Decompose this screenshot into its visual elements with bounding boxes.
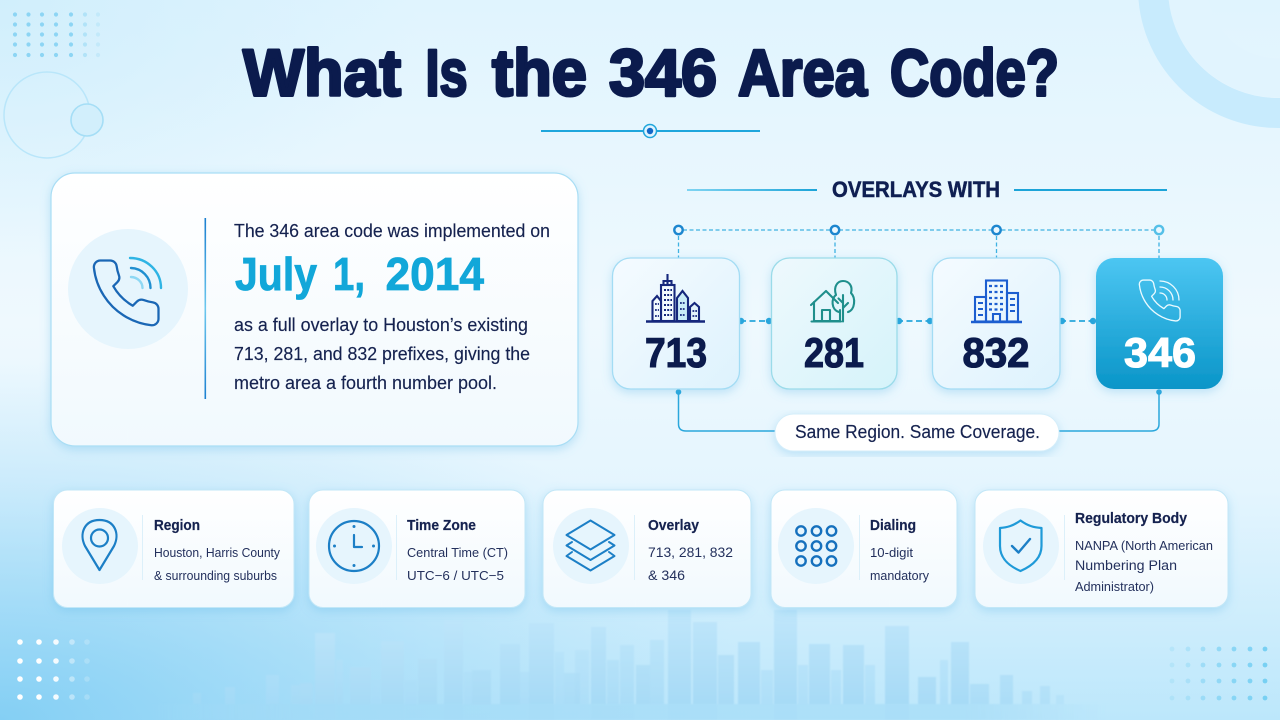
icon: downtown skyline [646, 274, 705, 322]
panel: overlay [543, 490, 751, 608]
panel: implementation date [51, 173, 578, 446]
text: date: July [235, 248, 317, 300]
panel: region: Houston, Harris County [154, 545, 280, 560]
card: 832: 832 [962, 329, 1030, 376]
title: Area [738, 36, 868, 110]
icon: phone with signal waves [68, 229, 188, 349]
panel: dialing [771, 490, 957, 608]
panel: regulatory body: Numbering Plan [1075, 558, 1177, 573]
card: 346 [1096, 258, 1223, 389]
panel: regulatory body: NANPA (North American [1075, 538, 1213, 553]
panel: time zone: Central Time (CT) [407, 545, 508, 560]
icon: shield with check [983, 508, 1059, 584]
text: date: 2014 [386, 248, 484, 300]
card: 832 [932, 258, 1060, 389]
panel: time zone: UTC−6 / UTC−5 [407, 568, 504, 583]
panel: dialing: 10-digit [870, 545, 913, 560]
text: description: as a full overlay to Houston’s existing [234, 315, 528, 335]
panel: dialing: Dialing [870, 518, 916, 534]
icon: house and tree [811, 281, 854, 322]
panel: regulatory body [975, 490, 1228, 608]
city skyline [150, 610, 1110, 720]
title: 346 [609, 36, 717, 110]
panel: overlay: & 346 [648, 567, 685, 583]
panel: dialing: mandatory [870, 568, 929, 583]
card: 346: 346 [1124, 329, 1196, 376]
dot grid bottom right [1170, 647, 1267, 700]
panel: region: Region [154, 518, 200, 534]
decorative circles top left [4, 72, 103, 158]
title: the [492, 36, 587, 110]
card: 713: 713 [645, 329, 707, 376]
panel: regulatory body: Regulatory Body [1075, 511, 1187, 527]
icon: clock [316, 508, 392, 584]
panel: region [54, 490, 294, 608]
connector network [674, 226, 1163, 431]
dot grid top left [13, 12, 100, 57]
text: intro line: The 346 area code was implemented on [234, 221, 550, 241]
text: description: 713, 281, and 832 prefixes, giving the [234, 344, 530, 364]
text: description [234, 315, 530, 393]
card: 713 [612, 258, 740, 389]
title: Is [426, 36, 468, 110]
icon: office buildings [971, 280, 1022, 322]
panel: region: & surrounding suburbs [154, 568, 277, 583]
title: Code? [890, 36, 1059, 110]
title: What [243, 36, 401, 110]
icon: white phone [1139, 280, 1180, 321]
callout: same region same coverage [775, 414, 1059, 451]
heading: overlays with: OVERLAYS WITH [832, 177, 1000, 202]
title divider [541, 124, 760, 138]
dot grid bottom left [17, 639, 90, 700]
text: date: 1, [333, 248, 365, 300]
decorative arcs top right [1153, 0, 1280, 113]
icon: keypad [778, 508, 854, 584]
card: 281: 281 [804, 329, 864, 376]
panel: overlay: Overlay [648, 518, 699, 534]
panel: regulatory body: Administrator) [1075, 579, 1154, 594]
icon: stacked layers [553, 508, 629, 584]
text: description: metro area a fourth number pool. [234, 373, 497, 393]
text: date [235, 248, 484, 300]
card: 281 [772, 258, 897, 389]
panel: time zone: Time Zone [407, 518, 476, 534]
title [243, 36, 1059, 110]
panel: time zone [309, 490, 525, 608]
icon: location pin [62, 508, 138, 584]
callout: same region same coverage: Same Region. Same Coverage. [795, 422, 1040, 442]
panel: overlay: 713, 281, 832 [648, 544, 733, 560]
